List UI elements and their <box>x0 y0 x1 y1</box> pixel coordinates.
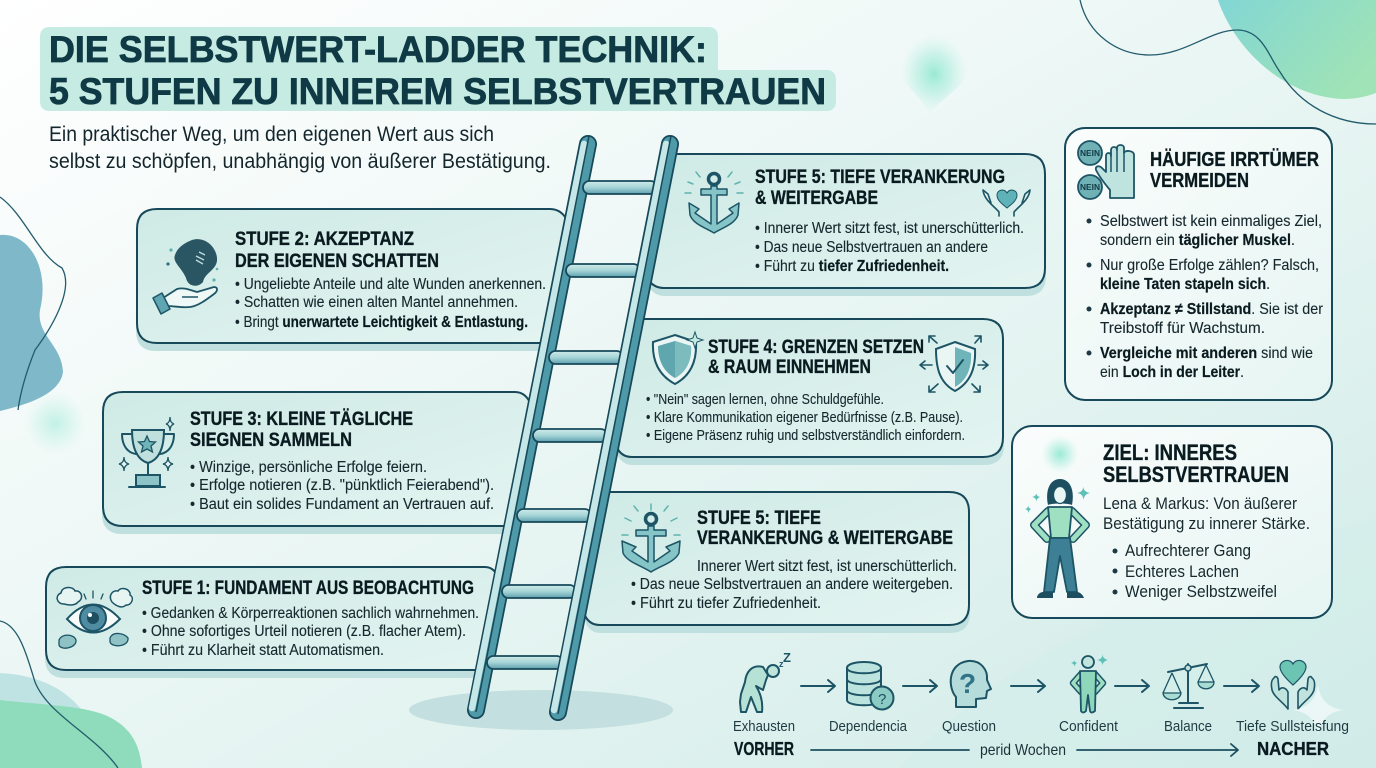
icon: exhausted person: Z <box>783 650 791 665</box>
bullet list: Echteres Lachen <box>1125 562 1239 581</box>
text block <box>631 558 957 612</box>
icon: shield with star <box>653 332 703 384</box>
ladder right rail <box>554 136 671 714</box>
heading: STUFE 5: TIEFE <box>697 508 821 529</box>
ladder rungs <box>487 181 657 669</box>
heading <box>755 167 1005 209</box>
bullet list: Aufrechterer Gang <box>1125 541 1251 560</box>
text block: • Das neue Selbstvertrauen an andere weitergeben. <box>631 576 953 593</box>
panel: Stufe 5 bottom <box>584 492 970 633</box>
icon: Nein bubbles and hand: NEIN <box>1080 149 1100 158</box>
labels: Dependencia <box>829 718 908 735</box>
arrow <box>1224 680 1259 692</box>
arrow <box>801 680 835 692</box>
text block <box>1103 494 1310 533</box>
text block: Innerer Wert sitzt fest, ist unerschütterlich. <box>697 558 957 575</box>
before label: VORHER <box>734 739 794 759</box>
timeline <box>733 650 1349 759</box>
subtitle <box>49 123 551 173</box>
labels: Balance <box>1164 718 1212 735</box>
heading: STUFE 4: GRENZEN SETZEN <box>708 337 924 358</box>
text block: • Eigene Präsenz ruhig und selbstverständlich einfordern. <box>646 428 965 444</box>
icon: head with question: ? <box>959 668 976 699</box>
labels: Exhausten <box>733 718 795 735</box>
icon: exhausted person <box>740 650 791 712</box>
text block: • Das neue Selbstvertrauen an andere <box>755 239 988 256</box>
text block: • Führt zu Klarheit statt Automatismen. <box>142 642 384 659</box>
text block <box>755 220 1024 275</box>
panel: Stufe 3 <box>102 392 531 534</box>
heading: VERMEIDEN <box>1150 170 1249 192</box>
text block: • Innerer Wert sitzt fest, ist unerschütterlich. <box>755 220 1024 237</box>
ladder left rail <box>472 136 589 712</box>
text block: • Klare Kommunikation eigener Bedürfnisse (z.B. Pause). <box>646 410 963 426</box>
heading: & WEITERGABE <box>755 188 878 209</box>
icon: eye with clouds <box>57 587 132 648</box>
panel: Häufige Irrtümer <box>1065 128 1332 400</box>
panel: Stufe 4 <box>616 319 1004 465</box>
icon: database with question: ? <box>878 691 886 708</box>
heading: SELBSTVERTRAUEN <box>1103 462 1289 487</box>
after label: NACHER <box>1257 739 1329 759</box>
text block <box>142 605 479 659</box>
sparkle <box>1293 685 1343 735</box>
panel: Stufe 5 top <box>646 154 1046 296</box>
heading <box>1150 148 1319 192</box>
text block: • Ohne sofortiges Urteil notieren (z.B. flacher Atem). <box>142 623 466 640</box>
text block: • Gedanken & Körperreaktionen sachlich wahrnehmen. <box>142 605 479 622</box>
bullet list: Weniger Selbstzweifel <box>1125 582 1277 601</box>
icon: anchor <box>685 172 743 233</box>
heading <box>190 409 413 451</box>
arrow <box>903 680 937 692</box>
icon: head with question <box>951 661 991 707</box>
icon: anchor with rays <box>622 504 680 572</box>
labels: Confident <box>1059 718 1119 735</box>
heading: STUFE 2: AKZEPTANZ <box>235 229 414 250</box>
text block: • Winzige, persönliche Erfolge feiern. <box>190 459 427 476</box>
text block: • Ungeliebte Anteile und alte Wunden anerkennen. <box>235 276 546 293</box>
labels <box>733 718 1349 735</box>
title: 5 STUFEN ZU INNEREM SELBSTVERTRAUEN <box>49 71 826 112</box>
duration label: perid Wochen <box>980 742 1066 759</box>
heading: DER EIGENEN SCHATTEN <box>235 251 439 272</box>
text block: Nur große Erfolge zählen? Falsch, <box>1100 257 1319 274</box>
text block: • Bringt unerwartete Leichtigkeit & Entlastung. <box>235 314 528 331</box>
icon: shadow in open hand <box>153 239 218 314</box>
icon: hands with heart <box>983 190 1030 216</box>
text block <box>1086 213 1324 381</box>
text block: kleine Taten stapeln sich. <box>1100 276 1270 293</box>
text block <box>646 392 965 444</box>
text block <box>190 459 494 513</box>
icon: Nein bubbles and hand: NEIN <box>1080 183 1100 192</box>
labels: Question <box>942 718 996 735</box>
title <box>40 27 836 112</box>
text block: Lena & Markus: Von äußerer <box>1103 494 1297 513</box>
timeline arrow <box>811 744 1238 756</box>
heading: STUFE 5: TIEFE VERANKERUNG <box>755 167 1005 188</box>
text block: Selbstwert ist kein einmaliges Ziel, <box>1100 213 1322 230</box>
heading <box>235 229 439 272</box>
heading: SIEGNEN SAMMELN <box>190 430 352 451</box>
icon: glow <box>1041 435 1079 473</box>
icon: trophy <box>119 417 174 487</box>
icon: confident woman <box>1025 479 1090 598</box>
heading: VERANKERUNG & WEITERGABE <box>697 528 953 549</box>
icon: shield with arrows <box>920 336 988 392</box>
arrow <box>1115 680 1149 692</box>
text block: Treibstoff für Wachstum. <box>1100 320 1265 337</box>
labels: Tiefe Sullsteisfung <box>1236 718 1349 735</box>
ladder <box>409 136 673 730</box>
heading <box>708 337 924 378</box>
subtitle: selbst zu schöpfen, unabhängig von äußerer Bestätigung. <box>49 150 551 173</box>
heading: & RAUM EINNEHMEN <box>708 357 871 378</box>
title: DIE SELBSTWERT-LADDER TECHNIK: <box>49 29 707 70</box>
text block: ein Loch in der Leiter. <box>1100 364 1244 381</box>
icon: database with question <box>847 662 894 710</box>
icon: exhausted person: z <box>779 659 784 669</box>
heading: STUFE 3: KLEINE TÄGLICHE <box>190 409 413 430</box>
icon: confident person <box>1071 654 1108 712</box>
heading: ZIEL: INNERES <box>1103 440 1237 465</box>
panel: Ziel <box>1012 426 1332 618</box>
text block: • Führt zu tiefer Zufriedenheit. <box>755 258 949 275</box>
subtitle: Ein praktischer Weg, um den eigenen Wert aus sich <box>49 123 494 146</box>
bullet list <box>1112 541 1277 601</box>
heading <box>697 508 953 549</box>
text block: Bestätigung zu innerer Stärke. <box>1103 514 1310 533</box>
heading: HÄUFIGE IRRTÜMER <box>1150 148 1319 171</box>
icon: Nein bubbles and hand <box>1078 141 1134 199</box>
text block: • Führt zu tiefer Zufriedenheit. <box>631 595 821 612</box>
arrow <box>1011 680 1045 692</box>
text block: • Baut ein solides Fundament an Vertrauen auf. <box>190 496 494 513</box>
panel: Stufe 2 <box>136 209 568 351</box>
text block: • Schatten wie einen alten Mantel annehmen. <box>235 294 518 311</box>
icon: hands with heart <box>1271 660 1315 709</box>
icon: balance scale <box>1163 664 1214 708</box>
text block: • Erfolge notieren (z.B. "pünktlich Feierabend"). <box>190 477 494 494</box>
text block: Vergleiche mit anderen sind wie <box>1100 345 1313 362</box>
text block: sondern ein täglicher Muskel. <box>1100 232 1295 249</box>
text block: Akzeptanz ≠ Stillstand. Sie ist der <box>1100 301 1324 318</box>
text block <box>235 276 546 331</box>
heading: STUFE 1: FUNDAMENT AUS BEOBACHTUNG <box>142 578 474 599</box>
text block: • "Nein" sagen lernen, ohne Schuldgefühle. <box>646 392 884 408</box>
heading <box>1103 440 1289 487</box>
panel: Stufe 1 <box>45 567 499 678</box>
